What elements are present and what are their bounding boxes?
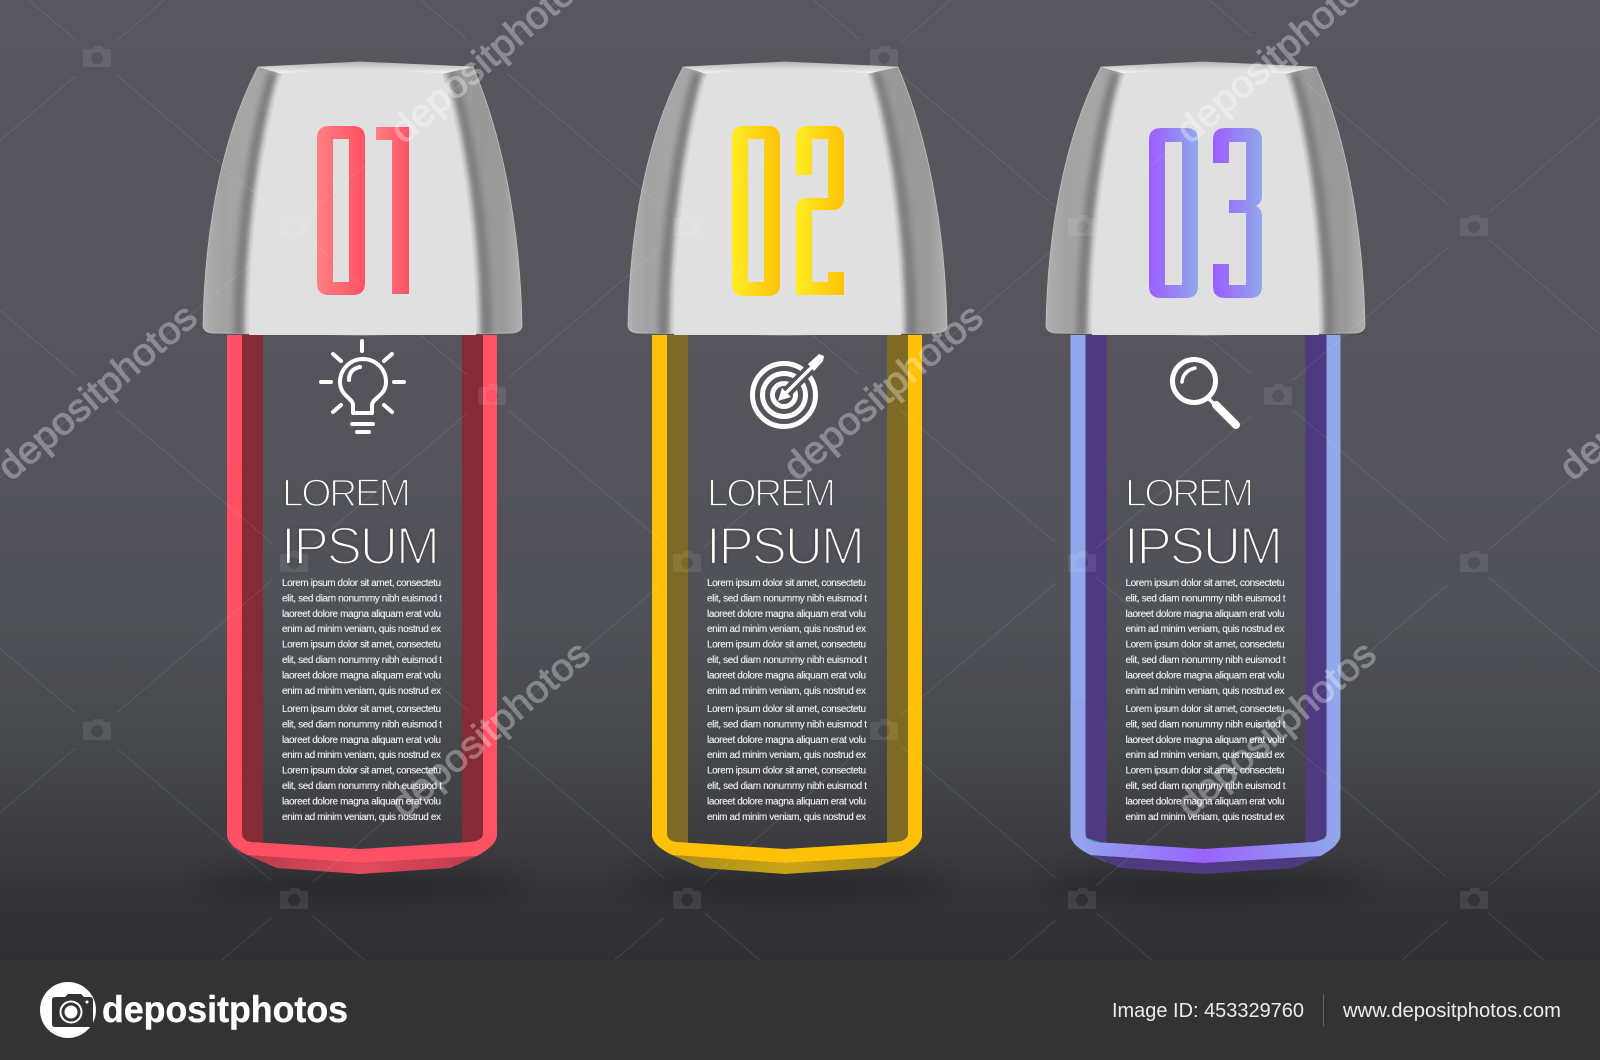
- number 03: [1149, 128, 1262, 298]
- number 01: [317, 126, 409, 295]
- body text: Lorem ipsum dolor sit amet, consectetu: [282, 766, 441, 777]
- cap: metallic header: [628, 62, 947, 340]
- body text: elit, sed diam nonummy nibh euismod t: [1126, 781, 1286, 792]
- cap: metallic header: [203, 62, 522, 340]
- watermark camera icons: [83, 46, 1488, 909]
- heading: lorem ipsum: LOREM: [707, 472, 836, 515]
- body text: laoreet dolore magna aliquam erat volu: [707, 609, 866, 620]
- body text: laoreet dolore magna aliquam erat volu: [1126, 735, 1284, 746]
- panel: step 01: [203, 62, 522, 874]
- body text: Lorem ipsum dolor sit amet, consectetu: [282, 640, 441, 651]
- body text: [707, 578, 867, 823]
- body text: laoreet dolore magna aliquam erat volu: [282, 670, 441, 681]
- body text: elit, sed diam nonummy nibh euismod t: [1126, 719, 1286, 730]
- icon: light bulb: [321, 341, 404, 432]
- heading: lorem ipsum: [706, 472, 865, 576]
- body text: elit, sed diam nonummy nibh euismod t: [282, 781, 442, 792]
- floor shadows: [197, 872, 1370, 896]
- website: www.depositphotos.com: [1342, 1000, 1561, 1022]
- body text: enim ad minim veniam, quis nostrud ex: [707, 750, 866, 761]
- frame: blue violet: [1070, 335, 1340, 874]
- body text: Lorem ipsum dolor sit amet, consectetu: [282, 704, 441, 715]
- panel: step 02: [628, 62, 947, 874]
- body text: enim ad minim veniam, quis nostrud ex: [707, 812, 866, 823]
- body text: Lorem ipsum dolor sit amet, consectetu: [707, 704, 866, 715]
- heading: lorem ipsum: LOREM: [282, 472, 411, 515]
- body text: laoreet dolore magna aliquam erat volu: [707, 670, 866, 681]
- body text: [282, 578, 442, 823]
- body text: elit, sed diam nonummy nibh euismod t: [1126, 593, 1286, 604]
- cap: metallic header: [1046, 62, 1365, 340]
- body text: laoreet dolore magna aliquam erat volu: [282, 735, 441, 746]
- icon: target with arrow: [752, 354, 824, 426]
- body text: laoreet dolore magna aliquam erat volu: [1126, 609, 1284, 620]
- logo: camera badge: [40, 982, 96, 1038]
- body text: Lorem ipsum dolor sit amet, consectetu: [707, 640, 866, 651]
- body text: elit, sed diam nonummy nibh euismod t: [282, 719, 442, 730]
- body text: enim ad minim veniam, quis nostrud ex: [282, 624, 441, 635]
- body text: laoreet dolore magna aliquam erat volu: [707, 796, 866, 807]
- image id: Image ID: 453329760: [1112, 1000, 1304, 1022]
- body text: enim ad minim veniam, quis nostrud ex: [282, 812, 441, 823]
- frame: red: [227, 335, 497, 874]
- number 02: [732, 126, 844, 296]
- body text: enim ad minim veniam, quis nostrud ex: [707, 686, 866, 697]
- footer bar: [0, 960, 1600, 1060]
- logo wordmark: depositphotos: [102, 989, 348, 1030]
- body text: enim ad minim veniam, quis nostrud ex: [707, 624, 866, 635]
- body text: [1126, 578, 1286, 823]
- body text: laoreet dolore magna aliquam erat volu: [1126, 670, 1284, 681]
- heading: lorem ipsum: LOREM: [1125, 472, 1254, 515]
- heading: lorem ipsum: [1124, 472, 1283, 576]
- body text: enim ad minim veniam, quis nostrud ex: [282, 750, 441, 761]
- body text: Lorem ipsum dolor sit amet, consectetu: [707, 766, 866, 777]
- body text: enim ad minim veniam, quis nostrud ex: [1126, 686, 1284, 697]
- body text: laoreet dolore magna aliquam erat volu: [282, 796, 441, 807]
- body text: elit, sed diam nonummy nibh euismod t: [282, 593, 442, 604]
- body text: Lorem ipsum dolor sit amet, consectetu: [1126, 578, 1284, 589]
- heading: lorem ipsum: IPSUM: [706, 517, 865, 576]
- body text: elit, sed diam nonummy nibh euismod t: [707, 719, 867, 730]
- heading: lorem ipsum: [281, 472, 440, 576]
- body text: Lorem ipsum dolor sit amet, consectetu: [1126, 704, 1284, 715]
- body text: enim ad minim veniam, quis nostrud ex: [282, 686, 441, 697]
- body text: laoreet dolore magna aliquam erat volu: [707, 735, 866, 746]
- frame: gold: [652, 335, 922, 874]
- body text: elit, sed diam nonummy nibh euismod t: [707, 781, 867, 792]
- watermark text: depositphotos: [1169, 633, 1384, 826]
- body text: Lorem ipsum dolor sit amet, consectetu: [282, 578, 441, 589]
- body text: elit, sed diam nonummy nibh euismod t: [282, 655, 442, 666]
- body text: enim ad minim veniam, quis nostrud ex: [1126, 624, 1284, 635]
- body text: Lorem ipsum dolor sit amet, consectetu: [707, 578, 866, 589]
- watermark text: depositphotos: [776, 296, 991, 489]
- body text: laoreet dolore magna aliquam erat volu: [282, 609, 441, 620]
- watermark text: depositphotos: [383, 633, 598, 826]
- body text: elit, sed diam nonummy nibh euismod t: [1126, 655, 1286, 666]
- panel: step 03: [1046, 62, 1365, 874]
- body text: enim ad minim veniam, quis nostrud ex: [1126, 750, 1284, 761]
- body text: laoreet dolore magna aliquam erat volu: [1126, 796, 1284, 807]
- body text: elit, sed diam nonummy nibh euismod t: [707, 593, 867, 604]
- icon: magnifying glass: [1172, 360, 1236, 425]
- body text: elit, sed diam nonummy nibh euismod t: [707, 655, 867, 666]
- divider: [1323, 994, 1324, 1026]
- heading: lorem ipsum: IPSUM: [281, 517, 440, 576]
- body text: Lorem ipsum dolor sit amet, consectetu: [1126, 766, 1284, 777]
- watermark text: [0, 0, 1600, 826]
- body text: Lorem ipsum dolor sit amet, consectetu: [1126, 640, 1284, 651]
- heading: lorem ipsum: IPSUM: [1124, 517, 1283, 576]
- body text: enim ad minim veniam, quis nostrud ex: [1126, 812, 1284, 823]
